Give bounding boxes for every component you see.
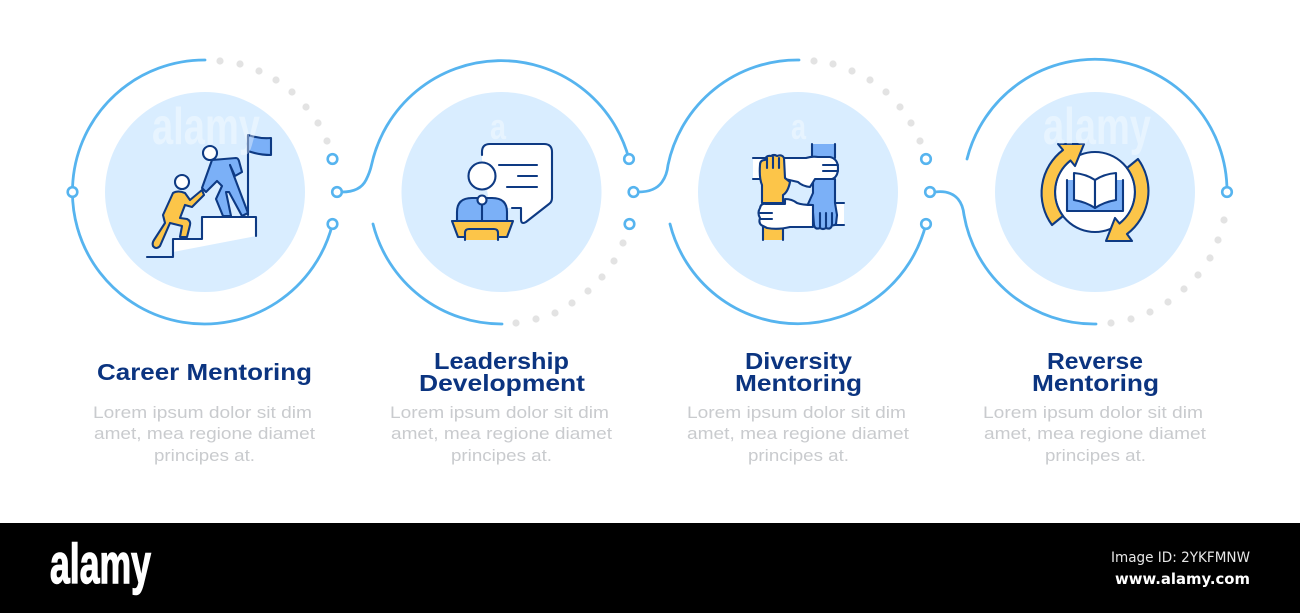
icon: four linked hands xyxy=(753,144,844,240)
description: principes at. xyxy=(451,446,552,465)
description: Lorem ipsum dolor sit dim xyxy=(93,403,312,422)
ring arcs and connector xyxy=(342,61,629,324)
inner circle xyxy=(105,92,305,292)
description: Lorem ipsum dolor sit dim xyxy=(983,403,1203,422)
heading xyxy=(735,348,862,396)
ring arc xyxy=(72,60,333,324)
progress dots xyxy=(512,239,627,327)
description: Lorem ipsum dolor sit dim xyxy=(687,403,906,422)
panel: diversity mentoring xyxy=(629,57,931,465)
description: Lorem ipsum dolor sit dim xyxy=(390,403,609,422)
ring nodes xyxy=(629,154,931,229)
heading: Reverse xyxy=(1047,348,1143,374)
heading: Mentoring xyxy=(735,370,862,396)
heading: Diversity xyxy=(745,348,852,374)
inner circle xyxy=(995,92,1195,292)
description xyxy=(687,403,909,465)
inner circle xyxy=(698,92,898,292)
ring nodes xyxy=(332,154,634,229)
description xyxy=(93,403,315,465)
heading: Leadership xyxy=(434,348,569,374)
description: amet, mea regione diamet xyxy=(687,424,909,443)
ring nodes xyxy=(925,187,1232,197)
heading: Career Mentoring xyxy=(97,359,312,385)
ring nodes xyxy=(68,154,337,229)
icon: book with cycle arrows xyxy=(1042,144,1148,241)
description: principes at. xyxy=(748,446,849,465)
heading: Development xyxy=(419,370,585,396)
progress dots xyxy=(216,57,331,145)
watermark: a xyxy=(791,106,807,147)
progress dots xyxy=(1107,216,1228,327)
ring arcs and connector xyxy=(935,59,1227,324)
watermark: alamy xyxy=(1043,98,1151,156)
heading xyxy=(419,348,585,396)
description xyxy=(390,403,612,465)
alamy logo: alamy xyxy=(50,532,151,595)
ring arcs and connector xyxy=(638,60,926,324)
inner circle xyxy=(402,92,602,292)
heading: Mentoring xyxy=(1032,370,1159,396)
panel: career mentoring xyxy=(68,57,337,465)
description: principes at. xyxy=(154,446,255,465)
panel: reverse mentoring xyxy=(925,59,1232,465)
icon: speaker at podium with speech bubble xyxy=(452,144,552,240)
heading xyxy=(1032,348,1159,396)
icon: climbing stairs with mentor xyxy=(147,135,271,257)
description: amet, mea regione diamet xyxy=(391,424,612,443)
panel: leadership development xyxy=(332,61,634,465)
description xyxy=(983,403,1206,465)
website: www.alamy.com xyxy=(1115,570,1250,588)
description: principes at. xyxy=(1045,446,1146,465)
description: amet, mea regione diamet xyxy=(984,424,1206,443)
description: amet, mea regione diamet xyxy=(94,424,315,443)
watermark: a xyxy=(490,106,507,147)
footer bar xyxy=(0,523,1300,613)
progress dots xyxy=(810,57,924,145)
image id: Image ID: 2YKFMNW xyxy=(1111,550,1250,566)
watermark: alamy xyxy=(152,98,260,156)
